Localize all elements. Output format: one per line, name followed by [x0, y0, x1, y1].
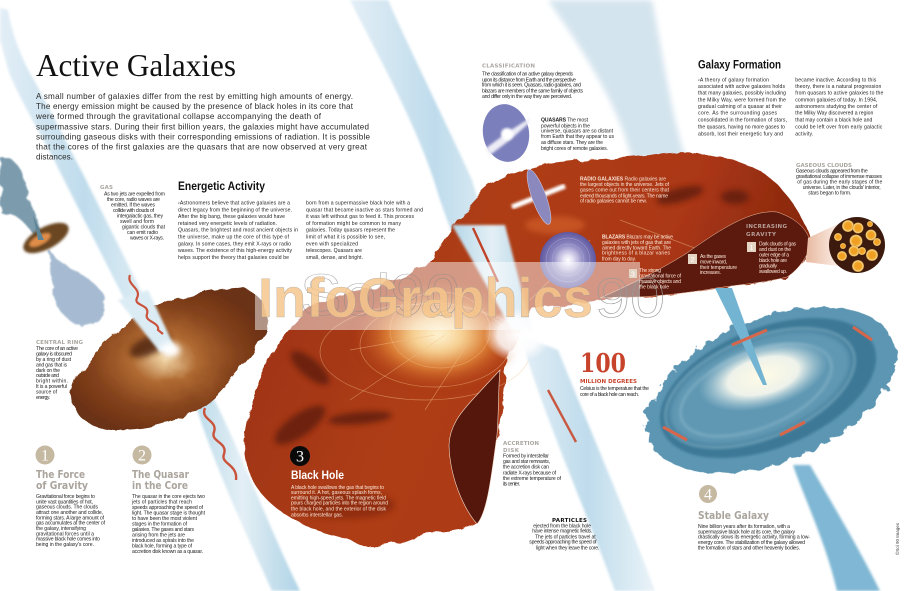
callout: 100 million degrees: Celsius is the temperature that the	[580, 386, 649, 392]
classification: from which it is seen. Quasars, radio galaxies, and	[482, 83, 581, 89]
gravity step 3: The strong	[639, 268, 661, 274]
blazars note	[602, 235, 673, 263]
step 1: force of gravity: the galaxy, intensifying	[36, 526, 86, 532]
bright swirl core	[353, 280, 523, 390]
intro text: distances.	[36, 153, 73, 162]
step 2: quasar in the core	[131, 446, 206, 555]
step 1: force of gravity	[36, 446, 106, 548]
accretion disk note: ACCRETION	[503, 441, 539, 447]
step 1: force of gravity: massive black hole comes into	[36, 537, 100, 543]
central ring note	[36, 340, 83, 401]
gaseous clouds note: of gas during the early stages of the	[797, 179, 882, 185]
step 1: force of gravity: of Gravity	[36, 480, 88, 492]
step 1: force of gravity: The Force	[36, 469, 85, 481]
intro text	[35, 92, 370, 162]
galaxy formation: associated with active galaxies holds	[698, 84, 785, 90]
classification: The classification of an active galaxy depends	[482, 72, 573, 78]
galaxy formation: astronomers studying the center of	[795, 104, 878, 110]
central ring note: CENTRAL RING	[36, 340, 83, 346]
increasing gravity steps: INCREASING	[746, 224, 787, 230]
step 4: stable galaxy	[698, 485, 810, 551]
step 1: force of gravity: gravitational forces until a	[36, 531, 94, 537]
quasars note: bright cores of remote galaxies.	[541, 146, 608, 152]
dark lower cut of disk	[449, 370, 500, 524]
watermark: 90	[595, 266, 665, 329]
step 2: quasar in the core: jets of particles that reach	[131, 500, 192, 506]
step 2: quasar in the core: 2	[138, 448, 146, 464]
central ring note: The core of an active	[36, 346, 78, 352]
central ring note: galaxy is obscured	[36, 352, 72, 358]
step 2: quasar in the core: stages in the formation of	[132, 522, 188, 528]
increasing gravity steps: GRAVITY	[746, 232, 777, 238]
energetic activity: quasar that became inactive as stars formed and	[306, 207, 423, 213]
energetic activity: waves. The existence of this high-energy activity	[178, 248, 292, 254]
radio galaxies note	[580, 177, 670, 205]
energetic activity: the universe, make up the core of this type of	[178, 234, 290, 240]
accretion disk note: radiate X-rays because of	[503, 470, 557, 476]
step 3: black hole: emitting high-speed jets. The magnetic field	[291, 495, 386, 501]
title: Active Galaxies	[36, 47, 236, 83]
gaseous clouds note: universe. Later, in the clouds' interior,	[803, 185, 881, 191]
galaxy formation: theory, there is a natural progression	[795, 84, 881, 90]
gaseous clouds note: gravitational collapse of immense masses	[796, 174, 882, 180]
galaxy formation: common galaxies of today. In 1994,	[795, 97, 877, 103]
lower left disk	[72, 288, 268, 430]
zoom cone	[806, 224, 838, 266]
jet: top centre	[350, 0, 520, 340]
gravity step 2: move inward,	[700, 259, 727, 265]
gas note: can emit radio	[127, 230, 158, 236]
radio galaxies note: of radio galaxies cannot be new.	[580, 199, 647, 205]
energetic activity: of formation might be common to many	[306, 221, 401, 227]
central ring note: It is a powerful	[36, 384, 67, 390]
gas note: gigantic clouds that	[122, 224, 166, 230]
galaxy formation: that may contain a black hole and	[795, 118, 872, 124]
energetic activity: helps support the theory that galaxies could be	[178, 255, 289, 261]
credit: ©Sol 90 Images	[894, 522, 900, 555]
galaxy formation: became inactive. According to this	[795, 77, 877, 83]
particles note: speeds approaching the speed of	[529, 540, 597, 546]
galaxy rotation arrows	[663, 327, 872, 440]
energetic activity: born from a supermassive black hole with a	[306, 200, 410, 206]
large accretion disk	[243, 152, 811, 546]
galaxy formation	[698, 57, 883, 137]
step 3: black hole: pours charged particles into the region around	[291, 501, 388, 507]
accretion disk note: Formed by interstellar	[503, 453, 549, 459]
blazars note: from day to day.	[602, 257, 636, 263]
galaxy formation: consolidated in the formation of stars,	[698, 118, 787, 124]
gaseous clouds note: stars began to form.	[808, 190, 851, 196]
energetic activity: Energetic Activity	[178, 179, 265, 193]
energetic activity: small, dense, and bright.	[306, 255, 363, 261]
jet below galaxy	[793, 465, 880, 591]
step 2: quasar in the core: black hole, forming a type of	[132, 544, 193, 550]
step 4: stable galaxy: Stable Galaxy	[698, 510, 769, 522]
galaxy formation: from quasars to active galaxies to the	[795, 91, 883, 97]
wavy red arrow: upper	[129, 275, 163, 334]
jet: upper left	[0, 8, 168, 350]
quasars note: universe, quasars are so distant	[541, 129, 614, 135]
step 4: stable galaxy: energy core. The stabilization of the galaxy allowed	[698, 540, 805, 546]
jet: lower left	[185, 370, 300, 591]
classification: upon its distance from Earth and the perspective	[482, 77, 576, 83]
step 2: quasar in the core: arising from the jets are	[132, 532, 185, 538]
classification: blazars are members of the same family of objects	[482, 88, 583, 94]
classification: and differ only in the way they are perceived.	[482, 94, 572, 100]
energetic activity: telescopes. Quasars are	[306, 248, 362, 254]
blazars note: BLAZARS Blazars may be active	[602, 235, 673, 241]
classification	[482, 64, 583, 100]
galaxy formation: the Milky Way discovered a region	[795, 111, 873, 117]
gas note: GAS	[100, 185, 113, 191]
central ring note: outside and	[36, 373, 59, 379]
swirl rings	[320, 220, 700, 410]
step 3: black hole: A black hole swallows the gas that begins to	[291, 485, 384, 491]
gas note: waves or X-rays.	[130, 235, 164, 241]
gravity step 2: increases.	[700, 270, 721, 276]
stable galaxy	[622, 274, 920, 591]
step 1: force of gravity: forming stars. A large amount of	[36, 515, 105, 521]
step 2: quasar in the core: The Quasar	[132, 469, 190, 481]
galaxy formation: activity.	[795, 131, 813, 137]
step 1: force of gravity: 1	[41, 448, 49, 464]
step 3: black hole: 3	[296, 448, 304, 466]
particles note: have intense magnetic fields.	[532, 529, 592, 535]
gravity step 2: 2	[691, 257, 695, 264]
central ring note: and gas that is	[36, 362, 67, 368]
galaxy formation: the quasars, having no more gases to	[698, 124, 785, 130]
gas note: collide with clouds of	[113, 208, 155, 214]
energetic activity: After the big bang, these galaxies would have	[178, 214, 285, 220]
step 1: force of gravity: gas accumulates at the center of	[36, 521, 106, 527]
step 2: quasar in the core: light. The quasar stage is thought	[132, 510, 206, 516]
energetic activity: retained very energetic levels of radiation.	[178, 221, 277, 227]
dark gravity well region	[600, 212, 811, 298]
particles note	[529, 518, 599, 552]
intro text: that the cores of the first galaxies are the quasars that are now observed at very great	[36, 142, 368, 152]
step 1: force of gravity: being in the galaxy's core.	[36, 542, 94, 548]
galaxy formation: could be left over from early galactic	[795, 124, 883, 130]
gravity step 2: As the gases	[700, 254, 726, 260]
step 1: force of gravity: attract one another and collide,	[36, 510, 103, 516]
central ring note: by a ring of dust	[36, 357, 72, 363]
gaseous clouds note	[796, 163, 882, 196]
gas note: emitted. If the waves	[111, 202, 155, 208]
gravity step 1	[747, 241, 796, 275]
step 2: quasar in the core: The quasar in the core ejects two	[132, 494, 205, 500]
callout: 100 million degrees: MILLION DEGREES	[580, 379, 637, 385]
small galaxy with gas clouds	[0, 158, 105, 325]
dark patches in disk	[269, 182, 749, 519]
blazar disk icon	[540, 232, 596, 288]
galaxy formation: that many galaxies, possibly including	[698, 91, 786, 97]
energetic activity: galaxy. In some cases, they emit X-rays or radio	[178, 241, 291, 247]
galaxy formation: Galaxy Formation	[698, 57, 781, 71]
step 4: stable galaxy: drastically slows its energetic activity, forming a low-	[698, 535, 810, 541]
callout: 100 million degrees	[580, 349, 649, 398]
galaxy formation: core. As the surrounding gases	[698, 111, 777, 117]
inset: gaseous cloud stars	[829, 217, 885, 273]
accretion disk note: the accretion disk can	[503, 465, 549, 471]
step 2: quasar in the core: speeds approaching the speed of	[132, 505, 204, 511]
gravity step 3: gravitational force of	[639, 274, 682, 280]
jet: lower centre with arrow	[520, 335, 655, 591]
step 2: quasar in the core: in the Core	[132, 480, 188, 492]
gravity step 1: and dust on the	[759, 247, 791, 253]
gravity step 3: massive objects and	[639, 279, 681, 285]
accretion disk note: the extreme temperature of	[503, 476, 562, 482]
galaxy formation: absorb, lost their energetic fury and	[698, 131, 783, 137]
step 4: stable galaxy: 4	[704, 486, 712, 504]
blazars note: brightness of a blazar varies	[602, 251, 670, 257]
particles note: The jets of particles travel at	[535, 534, 596, 540]
gravity step 3	[629, 268, 682, 290]
gravity step 3: the black hole	[639, 284, 669, 290]
radio galaxies note: extend thousands of light-years. The name	[580, 193, 668, 199]
gas note: As two jets are expelled from	[104, 191, 165, 197]
gravity step 1: outer edge of a	[759, 253, 789, 259]
radio galaxies note: RADIO GALAXIES Radio galaxies are	[580, 177, 666, 183]
galaxy formation: gradual calming of a quasar at their	[698, 104, 782, 110]
central ring note: dark on the	[36, 368, 60, 374]
energetic activity: galaxies. Today quasars represent the	[306, 228, 395, 234]
watermark: Sol90	[300, 263, 460, 328]
step 1: force of gravity: Gravitational force begins to	[36, 494, 95, 500]
galaxy formation: ›A theory of galaxy formation	[698, 77, 769, 83]
jet: top pale	[548, 0, 686, 160]
accretion disk note: its center.	[503, 481, 520, 487]
gravity step 2	[688, 254, 737, 276]
gaseous clouds note: Gaseous clouds appeared from the	[796, 169, 868, 175]
step 2: quasar in the core: to have been the most violent	[132, 516, 198, 522]
step 3: black hole: the black hole, and the exterior of the disk	[291, 507, 386, 513]
step 3: black hole: Black Hole	[291, 468, 344, 482]
callout: 100 million degrees: core of a black hole can reach.	[580, 392, 639, 398]
radio galaxy disk icon	[512, 167, 565, 227]
wavy red arrow: lower	[204, 408, 236, 480]
intro text: were formed through the gravitational collapse accompanying the death of	[35, 112, 322, 121]
quasars note: powerful objects in the	[541, 123, 590, 129]
jet above galaxy	[715, 288, 767, 385]
central ring note: source of	[36, 389, 58, 395]
blazars note: aimed directly toward Earth. The	[602, 245, 671, 251]
step 3: black hole	[290, 446, 388, 518]
step 3: black hole: absorbs interstellar gas.	[291, 512, 343, 518]
blazars note: galaxies with jets of gas that are	[602, 240, 671, 246]
gravity step 1: Dark clouds of gas	[759, 241, 796, 247]
gravity step 1: black hole are	[759, 258, 787, 264]
classification: CLASSIFICATION	[482, 64, 535, 70]
accretion disk note: gas and star remnants,	[503, 459, 550, 465]
step 4: stable galaxy: supermassive black hole at its core, the galaxy	[698, 529, 795, 535]
step 4: stable galaxy: the formation of stars and other heavenly bodies.	[698, 545, 800, 551]
white core burst	[484, 308, 552, 362]
jet over disk with red arrow	[452, 225, 532, 330]
energetic activity: even with specialized	[306, 241, 358, 247]
quasar disk icon	[478, 100, 534, 166]
step 2: quasar in the core: introduced as spirals into the	[132, 538, 194, 544]
energetic activity: it was left without gas to feed it. This process	[306, 214, 414, 220]
accretion disk note: DISK	[503, 448, 520, 454]
galaxy formation: the Milky Way, were formed from the	[698, 97, 786, 103]
energetic activity: direct legacy from the beginning of the universe.	[178, 207, 292, 213]
particles note: ejected from the black hole	[533, 523, 591, 529]
watermark: InfoGraphics	[258, 266, 593, 329]
energetic activity: ›Astronomers believe that active galaxies are a	[178, 200, 290, 206]
quasars note: as diffuse stars. They are the	[541, 140, 603, 146]
intro text: surrounding gaseous disks with their corresponding emissions of radiation. It is possible	[36, 132, 370, 141]
intro text: supermassive stars. During their first billion years, the galaxies might have accumulated	[36, 122, 369, 131]
step 2: quasar in the core: accretion disk known as a quasar.	[132, 549, 203, 555]
gravity step 1: swallowed up.	[759, 269, 787, 275]
radio galaxies note: gases come out from their centers that	[580, 188, 670, 194]
step 4: stable galaxy: Nine billion years after its formation, with a	[698, 524, 790, 530]
callout: 100 million degrees: 100	[580, 349, 626, 379]
gravity step 1: 1	[750, 245, 754, 252]
step 1: force of gravity: unite vast quantities of hot,	[36, 499, 93, 505]
central ring note: bright within.	[36, 379, 68, 385]
step 1: force of gravity: gaseous clouds. The clouds	[36, 505, 98, 511]
intro text: The energy emission might be caused by the presence of black holes in its core that	[36, 102, 354, 111]
step 2: quasar in the core: galaxies. The gases and stars	[132, 527, 194, 533]
quasars note: from Earth that they appear to us	[541, 134, 614, 140]
gravity step 3: 3	[631, 272, 635, 278]
energetic activity: Quasars, the brightest and most ancient objects in	[178, 228, 298, 234]
central ring note: energy.	[36, 395, 50, 401]
radio galaxies note: the largest objects in the universe. Jets of	[580, 182, 670, 188]
accretion disk note	[503, 441, 562, 487]
particles note: light when they leave the core.	[536, 546, 599, 552]
quasars note: QUASARS The most	[541, 117, 589, 123]
gas note: swell and form	[120, 219, 154, 225]
gaseous clouds note: GASEOUS CLOUDS	[796, 163, 852, 169]
step 3: black hole: surround it. A hot, gaseous splash forms,	[291, 490, 382, 496]
gas note: the core, radio waves are	[107, 197, 160, 203]
intro text: A small number of galaxies differ from the rest by emitting high amounts of energy.	[36, 92, 353, 101]
gas note: intergalactic gas, they	[117, 213, 163, 219]
increasing gravity steps	[629, 224, 796, 290]
gravity step 1: gradually	[759, 263, 778, 269]
gas note	[100, 185, 166, 241]
energetic activity: limit of what it is possible to see,	[306, 234, 385, 240]
gravity step 2: their temperature	[700, 265, 737, 271]
energetic activity	[178, 179, 423, 261]
quasars note	[541, 117, 614, 152]
particles note: PARTICLES	[552, 518, 587, 524]
